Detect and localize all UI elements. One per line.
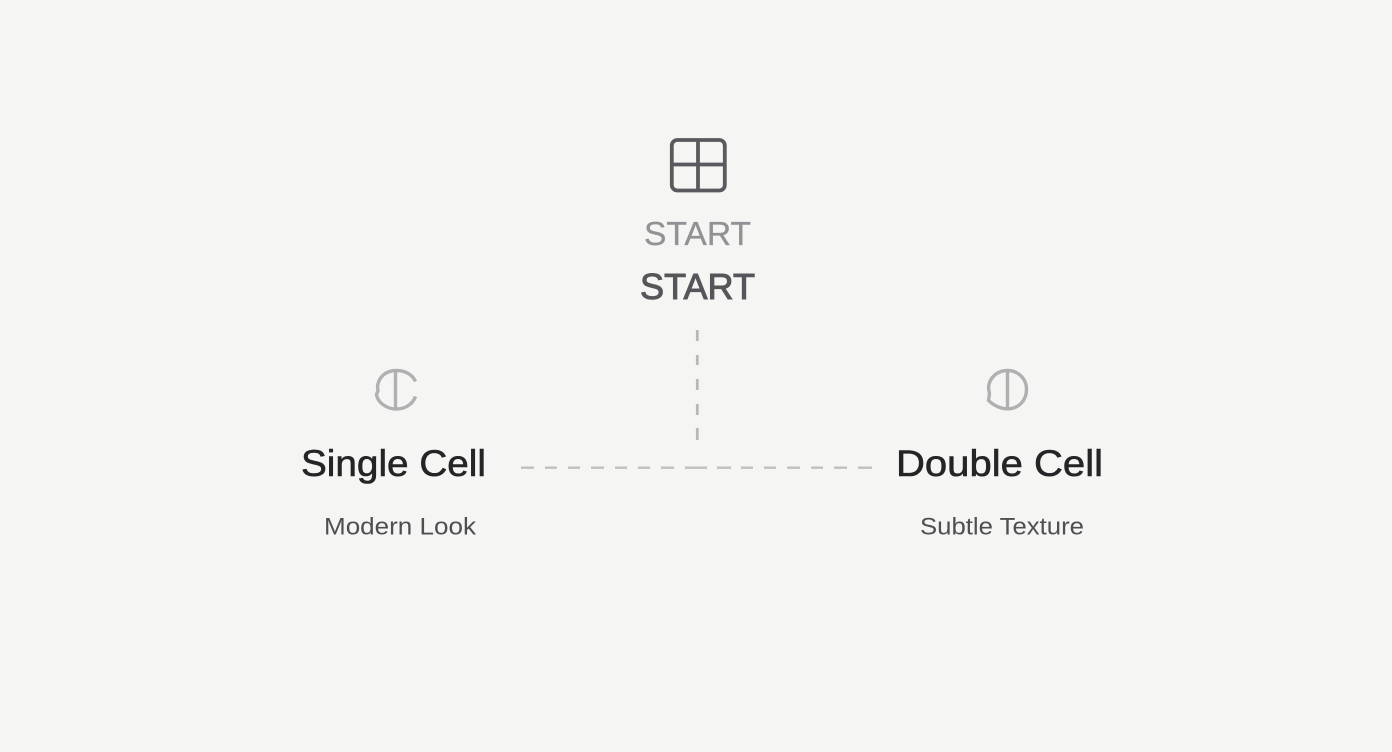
icon: double cell circle: [988, 370, 1026, 409]
panel: single cell: [301, 370, 486, 540]
label: Single Cell: Single Cell: [301, 442, 486, 484]
caption: Modern Look: Modern Look: [324, 514, 477, 540]
icon: four-pane grid: [672, 140, 725, 190]
connector: horizontal dashed line: [521, 467, 872, 469]
panel: double cell: [896, 370, 1103, 540]
icon: single cell open circle: [376, 370, 416, 409]
heading: START (light): START: [644, 216, 751, 253]
caption: Subtle Texture: Subtle Texture: [920, 514, 1084, 540]
connector: vertical dashed line: [696, 330, 699, 440]
label: Double Cell: Double Cell: [896, 442, 1103, 484]
heading: START (dark): START: [640, 266, 755, 307]
